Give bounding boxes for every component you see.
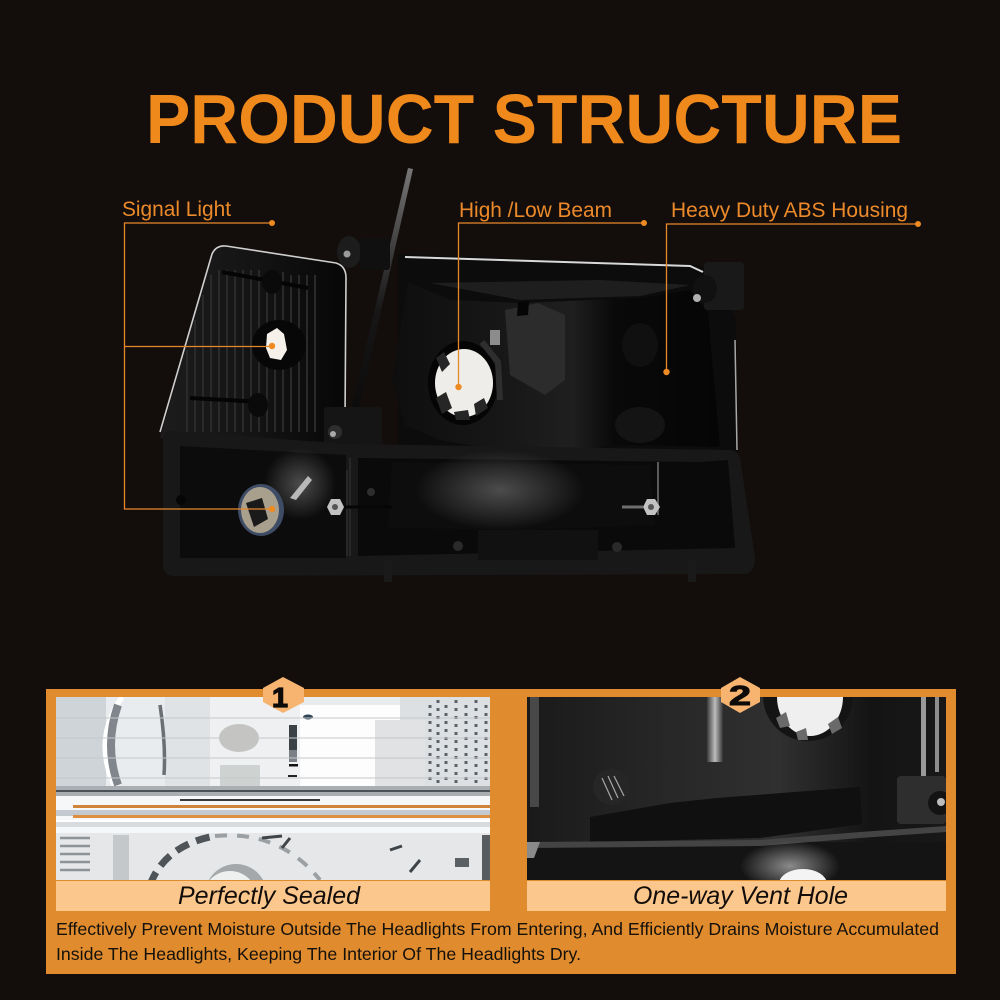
badge 2 [721,677,760,713]
lower bumper housing [163,431,755,582]
badge 1 [263,677,304,713]
title: PRODUCT STRUCTURE [146,80,902,158]
caption bar: One-way Vent Hole [527,881,946,911]
callout: High /Low Beam: High /Low Beam [459,198,612,222]
callout: Signal Light: Signal Light [122,197,231,221]
badge 2: 2 [729,680,751,711]
description text [56,919,939,964]
lens mounting posts [190,272,308,402]
mounting clips [324,236,744,445]
signal lens [160,246,346,442]
caption bar: Perfectly Sealed: Perfectly Sealed [178,882,361,910]
callout: High /Low Beam [455,198,647,390]
small mounting tabs [367,488,375,496]
description text: Inside The Headlights, Keeping The Interior Of The Headlights Dry. [56,944,581,964]
callout: Heavy Duty ABS Housing: Heavy Duty ABS Housing [671,198,908,222]
adjuster rod [352,168,413,408]
product photo: headlight assembly [160,168,755,582]
photo: one-way vent hole [527,697,946,880]
description text: Effectively Prevent Moisture Outside The Headlights From Entering, And Efficiently Drains Moisture Accumulated [56,919,939,939]
caption bar: Perfectly Sealed [56,881,490,911]
horizontal trim band [56,786,490,833]
bumper nuts [327,499,344,515]
callout: Heavy Duty ABS Housing [663,198,921,375]
clip and screw [897,776,946,824]
bulb opening [763,697,844,741]
bumper socket [238,484,284,536]
lower lens reflector [60,833,490,880]
callout: Signal Light [122,197,275,512]
panel: features [46,689,956,974]
caption bar: One-way Vent Hole: One-way Vent Hole [633,882,848,910]
photo: sealed headlight lens [56,697,490,880]
main beam housing [392,254,738,456]
badge 1: 1 [272,682,288,713]
high/low beam bulb hole [428,341,500,425]
